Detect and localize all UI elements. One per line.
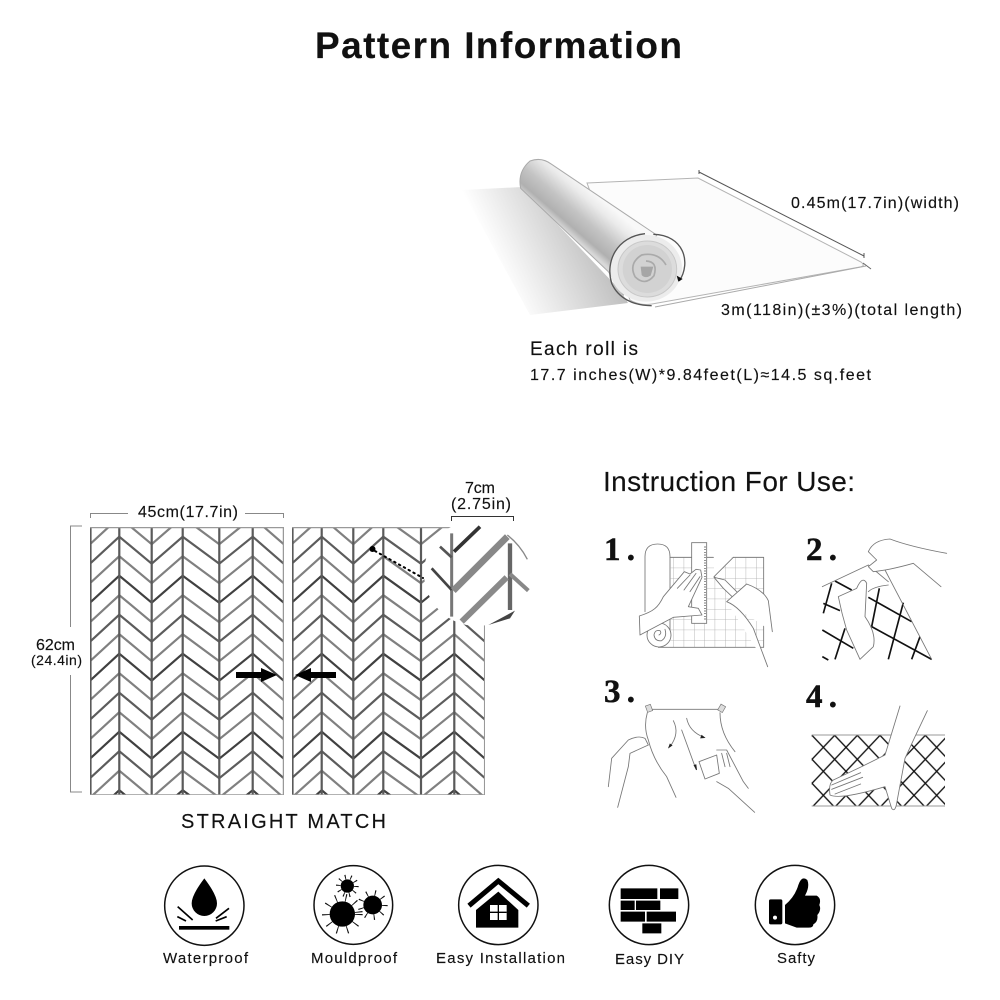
right hand — [717, 750, 755, 812]
step 2 — [806, 532, 947, 660]
step 4: 4 . — [806, 679, 837, 715]
label: mouldproof: Mouldproof — [311, 950, 398, 967]
label: waterproof: Waterproof — [163, 950, 249, 967]
step 1 — [604, 532, 772, 667]
dimension: sheet height — [31, 526, 82, 792]
dimension: repeat width — [451, 480, 514, 521]
floor shadow — [462, 187, 628, 315]
smoothing arrows — [669, 718, 705, 770]
magnified pattern detail — [424, 520, 536, 626]
heading: instructions: Instruction For Use: — [603, 466, 855, 497]
illustration: wallpaper roll — [462, 159, 871, 315]
roll end — [610, 234, 685, 306]
arrow: right — [236, 668, 277, 682]
roll description: 17.7 inches(W)*9.84feet(L)≈14.5 sq.feet — [530, 367, 872, 384]
step 3: 3 . — [604, 674, 635, 710]
width dimension line — [699, 170, 864, 258]
step 4 — [806, 679, 945, 810]
dimension: sheet width: 45cm(17.7in) — [138, 504, 238, 521]
label: easy DIY: Easy DIY — [615, 951, 684, 968]
squeegee — [699, 755, 719, 779]
panel: left pattern sheet — [90, 527, 284, 795]
arrow: left — [295, 668, 336, 682]
roll description — [530, 339, 872, 384]
left hand — [608, 737, 648, 807]
label: total length: 3m(118in)(±3%)(total length) — [721, 302, 962, 319]
label: width: 0.45m(17.7in)(width) — [791, 195, 959, 212]
roll body — [520, 159, 657, 295]
dimension: sheet height: 62cm — [36, 637, 75, 654]
tape and paper — [645, 704, 735, 797]
roll description: Each roll is — [530, 339, 638, 360]
dimension: sheet width — [90, 504, 284, 521]
dotted leader line — [370, 546, 423, 578]
lattice panel — [812, 735, 945, 806]
top hand — [868, 539, 947, 587]
icon: easy installation — [459, 865, 538, 945]
lower hand — [838, 580, 874, 659]
paper with lattice — [822, 581, 932, 660]
icon: waterproof — [165, 866, 244, 945]
icon: safety thumbs up — [755, 865, 835, 945]
unrolled sheet — [587, 178, 863, 304]
caption: straight match: STRAIGHT MATCH — [181, 811, 386, 833]
right hand and knife — [714, 577, 748, 607]
hand — [830, 706, 927, 810]
step 3 — [604, 674, 755, 812]
dimension: sheet height: (24.4in) — [31, 652, 82, 668]
dimension: repeat width: 7cm — [465, 480, 495, 497]
label: safety: Safty — [777, 950, 816, 967]
grid sheet — [645, 544, 764, 647]
title: Pattern Information — [315, 25, 682, 66]
step 1: 1 . — [604, 532, 635, 568]
left hand — [639, 569, 702, 635]
icon: easy DIY — [609, 865, 689, 945]
step 2: 2 . — [806, 532, 837, 568]
ruler — [692, 543, 707, 623]
label: easy installation: Easy Installation — [436, 950, 565, 967]
length dimension tick — [863, 263, 871, 269]
icon: mouldproof — [314, 866, 393, 944]
panel: right pattern sheet — [292, 527, 485, 795]
dimension: repeat width: (2.75in) — [451, 496, 511, 513]
